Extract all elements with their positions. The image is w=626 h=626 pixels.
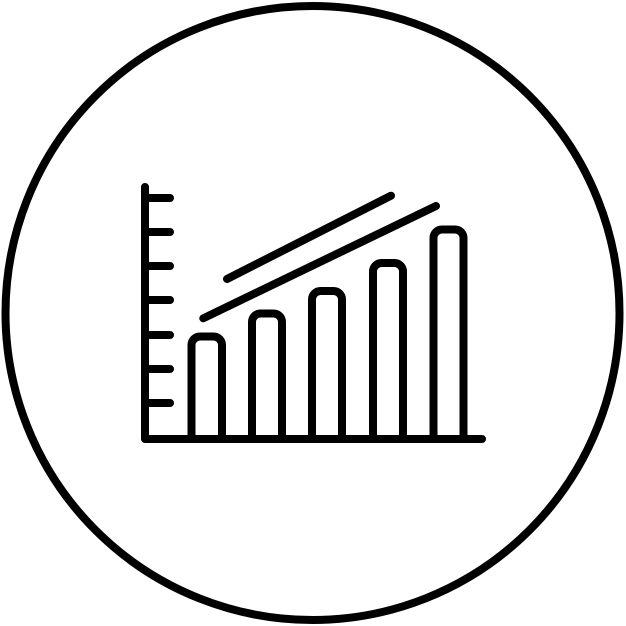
chart axes [145,187,482,439]
bar 1 [192,336,222,439]
bar 3 [312,291,342,439]
bar 5 [434,230,464,439]
upper trend line [227,196,391,279]
axis tick marks [145,198,170,403]
bar 4 [373,263,403,439]
bar 2 [252,314,282,439]
lower trend line [203,206,436,318]
